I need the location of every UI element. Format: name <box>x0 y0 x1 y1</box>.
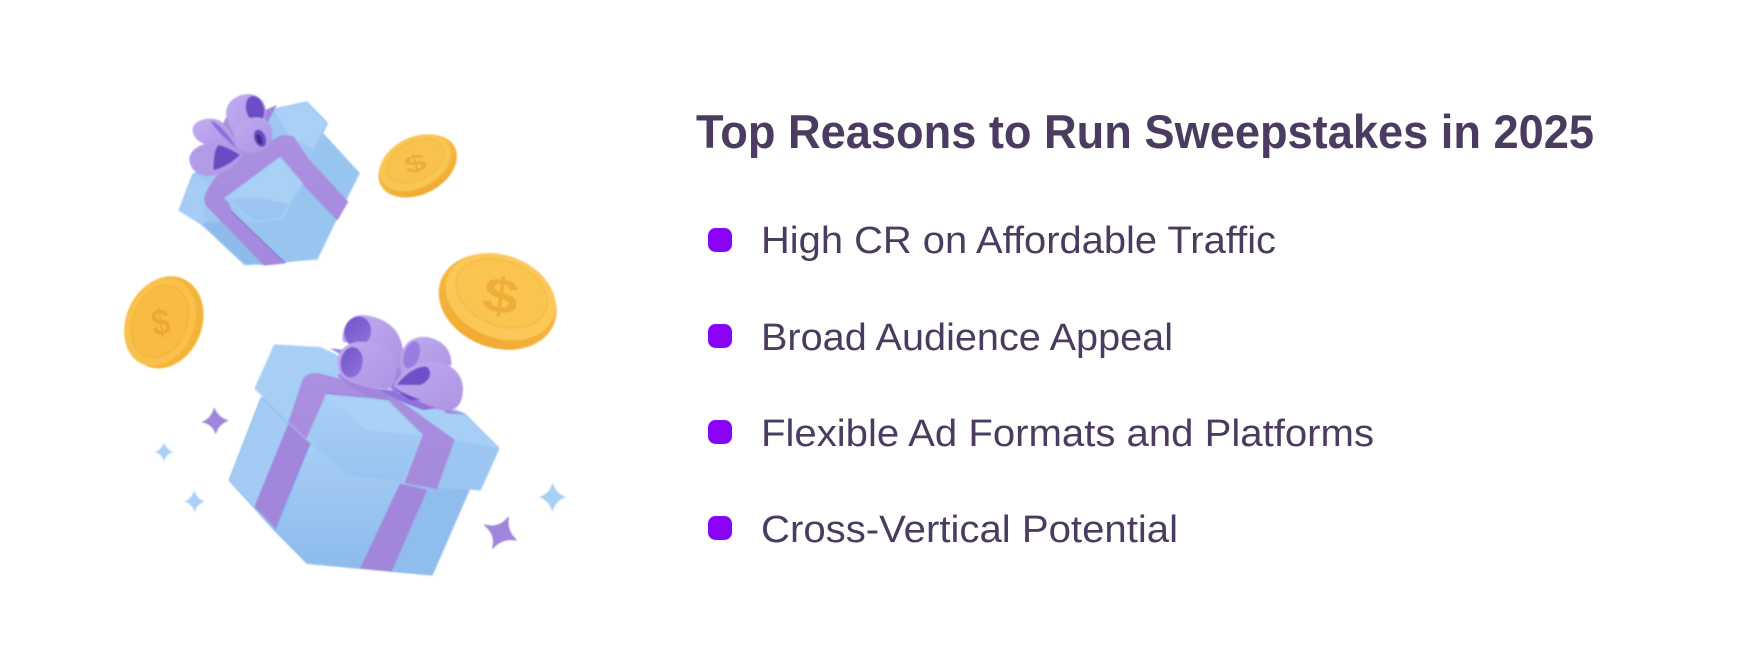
item: Cross-Vertical Potential: Cross-Vertical Potential <box>761 509 1178 551</box>
gift lid <box>256 346 498 489</box>
item: Broad Audience Appeal: Broad Audience Appeal <box>761 317 1173 359</box>
coin: top small <box>368 122 468 210</box>
sparkle: blue lower <box>184 490 205 512</box>
title: Top Reasons to Run Sweepstakes in 2025 <box>696 105 1594 158</box>
coin: left <box>111 264 217 380</box>
list of reasons <box>708 220 1374 551</box>
small gift bow <box>189 94 273 176</box>
sparkles <box>155 408 567 548</box>
large gift bow <box>330 313 467 414</box>
sparkle: purple small <box>203 408 228 433</box>
item: High CR on Affordable Traffic: High CR on Affordable Traffic <box>761 220 1276 262</box>
large gift box <box>230 346 498 574</box>
sparkle: blue right <box>539 482 567 512</box>
coin: left: $ <box>149 300 173 344</box>
gift body <box>230 398 468 574</box>
item: Flexible Ad Formats and Platforms: Flexible Ad Formats and Platforms <box>761 413 1374 455</box>
coin: right large: $ <box>479 267 522 326</box>
illustration: gifts, coins and sparkles <box>111 94 571 574</box>
sparkle: purple right <box>485 517 516 548</box>
coin: top small: $ <box>401 148 430 180</box>
coin: right large <box>425 237 571 366</box>
small gift box <box>180 94 358 266</box>
coins top small and right large <box>368 122 571 366</box>
sparkle: blue small <box>155 442 173 461</box>
